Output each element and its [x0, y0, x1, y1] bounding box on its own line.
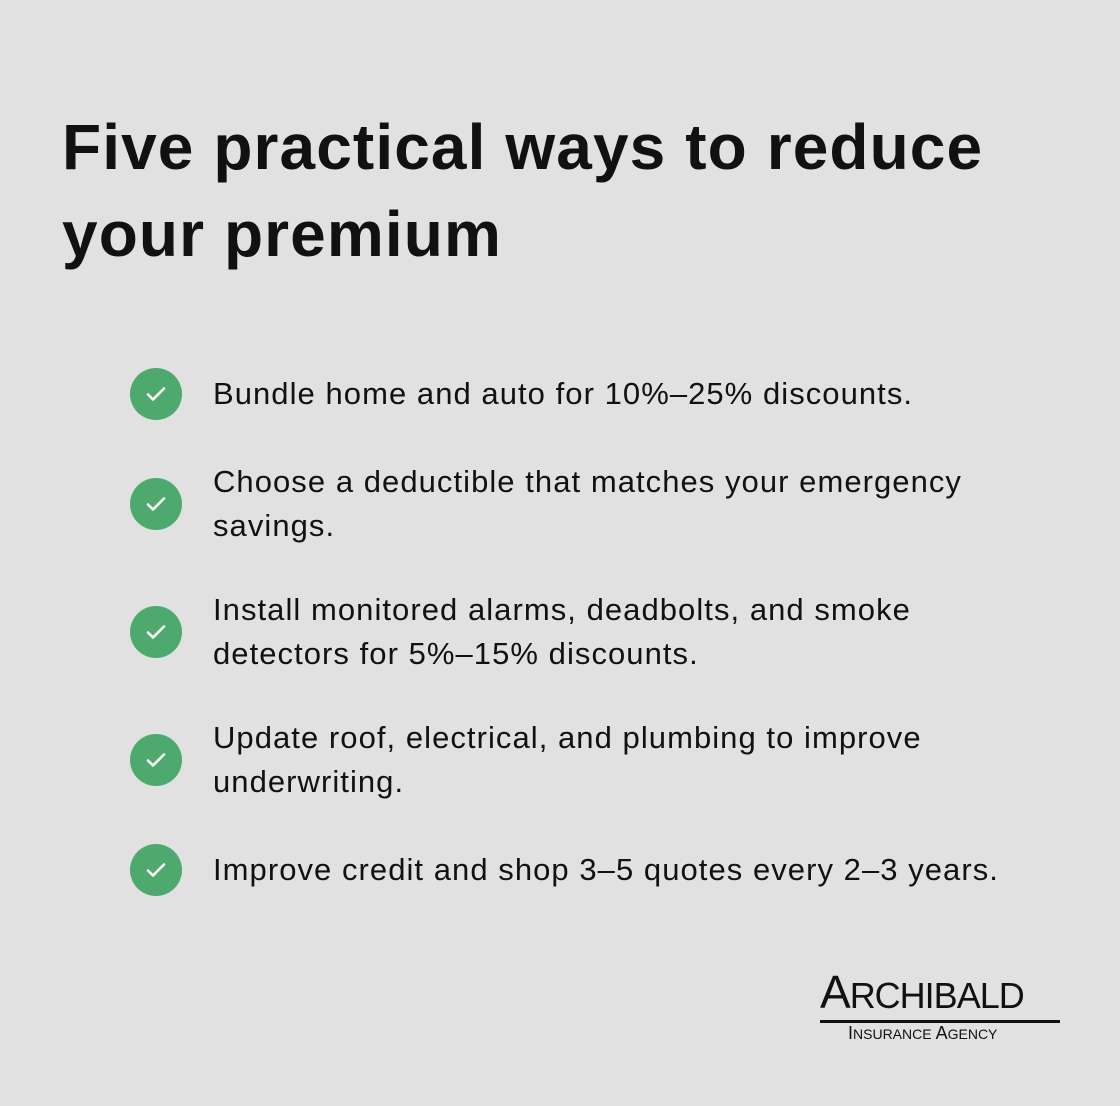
item 1	[130, 368, 913, 420]
icon: check	[130, 844, 182, 896]
item 5: Improve credit and shop 3–5 quotes every 2–3 years.	[213, 852, 999, 887]
logo: ARCHIBALD	[820, 966, 1024, 1018]
logo	[820, 966, 1060, 1043]
title: Five practical ways to reduce your premium	[62, 111, 983, 270]
logo: INSURANCE AGENCY	[848, 1023, 997, 1043]
icon: check	[130, 606, 182, 658]
item 4: Update roof, electrical, and plumbing to improve underwriting.	[213, 720, 922, 799]
icon: check	[130, 368, 182, 420]
icon: check	[130, 478, 182, 530]
item 1: Bundle home and auto for 10%–25% discounts.	[213, 376, 913, 411]
item 3: Install monitored alarms, deadbolts, and smoke detectors for 5%–15% discounts.	[213, 592, 911, 671]
item 2: Choose a deductible that matches your emergency savings.	[213, 464, 962, 543]
icon: check	[130, 734, 182, 786]
item 5	[130, 844, 999, 896]
